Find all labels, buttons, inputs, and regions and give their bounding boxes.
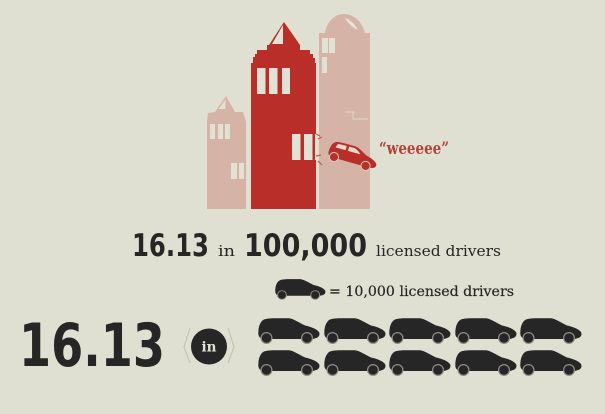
headline: 16.13 in 100,000 licensed drivers [132, 228, 501, 264]
building: central red tower [251, 22, 322, 209]
legend: one car equals 10,000 licensed drivers [275, 279, 514, 300]
label: weeeee: “weeeee” [379, 139, 449, 158]
headline: 16.13 in 100,000 licensed drivers: licensed drivers [376, 242, 501, 260]
illustration: buildings and falling car [207, 14, 449, 209]
headline: 16.13 in 100,000 licensed drivers: 100,000 [244, 228, 367, 264]
headline: 16.13 in 100,000 licensed drivers: in [218, 242, 235, 260]
legend: one car equals 10,000 licensed drivers: = 10,000 licensed drivers [329, 284, 514, 300]
big number: 16.13: 16.13 [19, 311, 165, 381]
headline: 16.13 in 100,000 licensed drivers: 16.13 [132, 228, 209, 264]
building: left pink tower [207, 96, 246, 209]
badge: in [184, 328, 234, 364]
icon: legend car [275, 279, 325, 300]
badge: in: in [202, 340, 217, 356]
car grid: ten cars [258, 318, 581, 376]
icon: red falling car [326, 140, 380, 173]
building: right pink domed tower [319, 14, 370, 209]
